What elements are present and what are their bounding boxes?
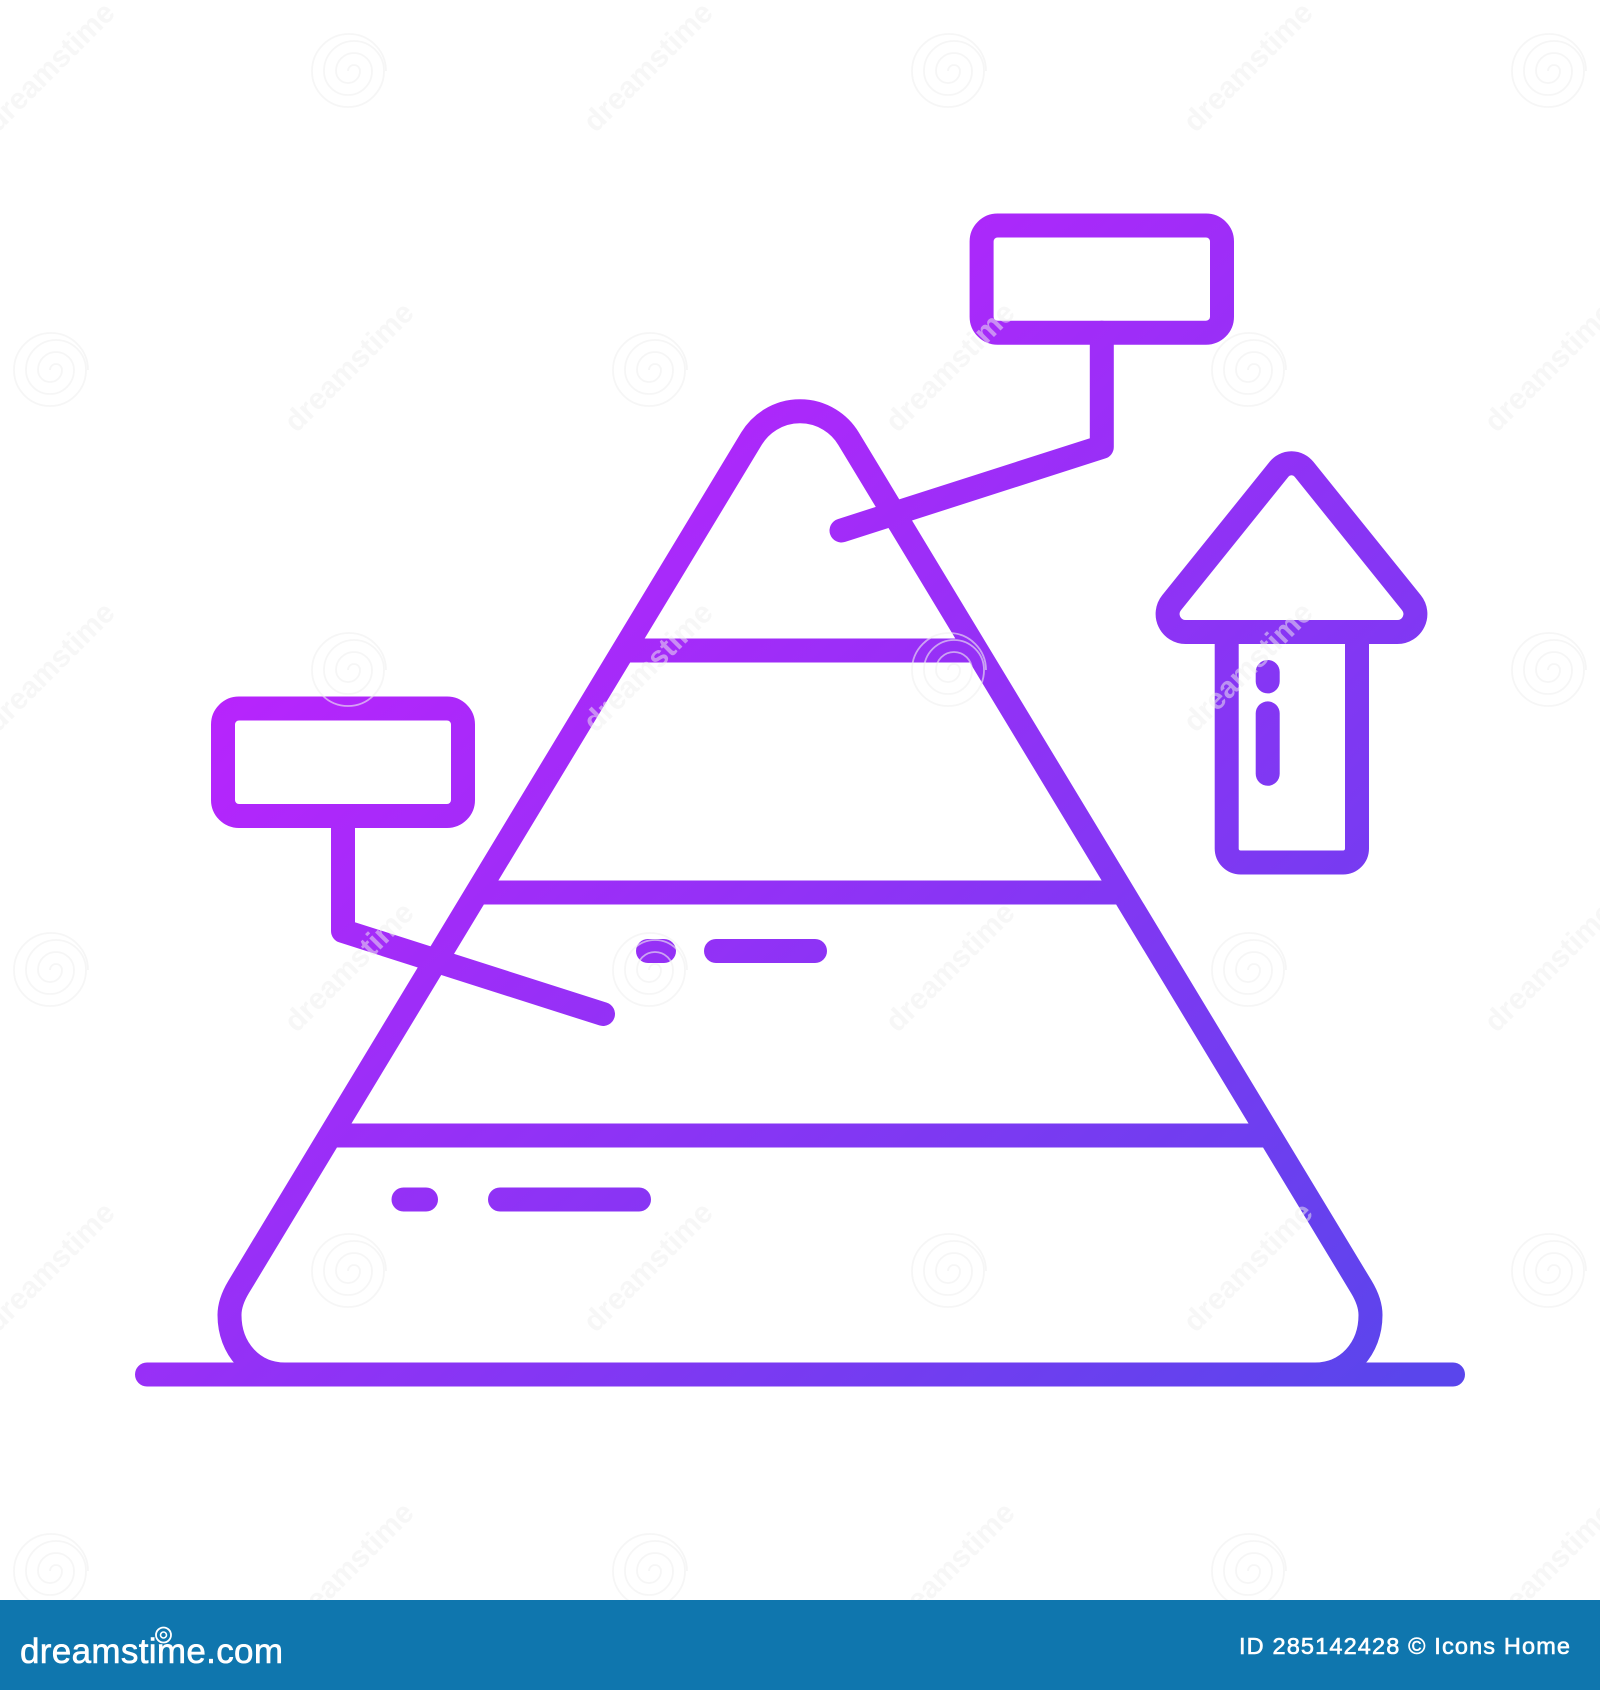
footer logo: dreamstime.com [20, 1632, 283, 1671]
watermark pattern: dreamstime [879, 1496, 1021, 1638]
right callout box and pointer [842, 226, 1222, 530]
icon: upward arrow [1168, 463, 1415, 862]
lower tier dashes [404, 1188, 639, 1212]
watermark pattern: dreamstime [278, 296, 420, 438]
watermark pattern: dreamstime [879, 296, 1021, 438]
footer bar [0, 1600, 1600, 1690]
pyramid outline [230, 411, 1370, 1374]
watermark pattern: dreamstime [278, 1496, 420, 1638]
watermark pattern: dreamstime [278, 896, 420, 1038]
watermark pattern: dreamstime [577, 0, 719, 138]
footer image id and credit: ID 285142428 © Icons Home [1239, 1633, 1570, 1659]
watermark pattern: dreamstime [1177, 596, 1319, 738]
watermark pattern: dreamstime [879, 896, 1021, 1038]
upper tier dashes [648, 939, 815, 963]
left callout box and pointer [223, 708, 603, 1014]
icon: pyramid with callouts and arrow [147, 226, 1453, 1374]
watermark pattern: dreamstime [1177, 1196, 1319, 1338]
watermark pattern: dreamstime [1177, 0, 1319, 138]
ground line [147, 1362, 1453, 1386]
pyramid tier dividers [330, 650, 1270, 1136]
watermark pattern: dreamstime [577, 596, 719, 738]
watermark pattern: dreamstime [577, 1196, 719, 1338]
